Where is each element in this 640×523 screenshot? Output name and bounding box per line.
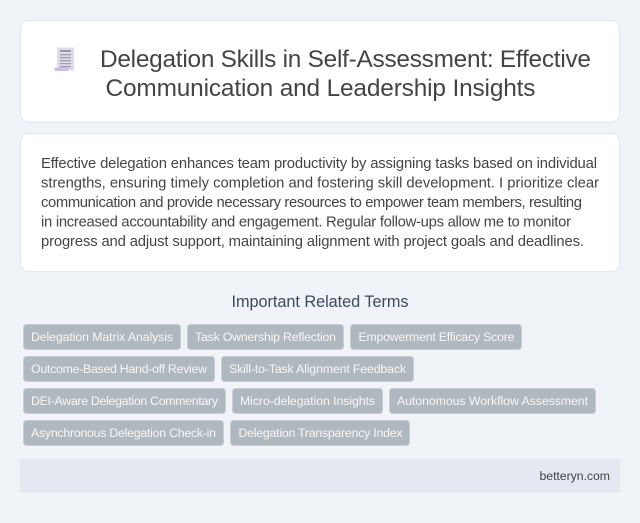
title [100, 46, 591, 102]
tag: empowerment efficacy score [350, 324, 522, 350]
icon: document scroll [54, 48, 74, 71]
description text: communication and provide necessary resources to empower team members, resulting [41, 195, 582, 211]
tag: skill-to-task alignment feedback: Skill-to-Task Alignment Feedback [229, 362, 407, 376]
tag: empowerment efficacy score: Empowerment Efficacy Score [358, 330, 515, 344]
description text: strengths, ensuring timely completion and fostering skill development. I prioritize clear [41, 176, 599, 192]
tag: task ownership reflection [188, 324, 344, 350]
footer bar [20, 459, 620, 492]
panel: title card [20, 20, 620, 122]
tag: autonomous workflow assessment [390, 388, 596, 414]
description text: in increased accountability and engagement. Regular follow-ups allow me to monitor [41, 214, 571, 230]
description text: Effective delegation enhances team productivity by assigning tasks based on individual [41, 156, 597, 172]
tag: autonomous workflow assessment: Autonomous Workflow Assessment [397, 394, 589, 408]
tag: skill-to-task alignment feedback [222, 356, 414, 382]
tag list [24, 324, 596, 446]
tag: asynchronous delegation check-in: Asynchronous Delegation Check-in [31, 426, 216, 440]
tag: outcome-based hand-off review: Outcome-Based Hand-off Review [31, 362, 207, 376]
tag: micro-delegation insights [232, 388, 382, 414]
footer source text: betteryn.com [540, 469, 610, 483]
description text: progress and adjust support, maintaining alignment with project goals and deadlines. [41, 234, 584, 250]
tag: outcome-based hand-off review [24, 356, 214, 382]
tag: asynchronous delegation check-in [24, 420, 224, 446]
title: Communication and Leadership Insights [106, 75, 536, 102]
tag: delegation transparency index: Delegation Transparency Index [238, 426, 403, 440]
tag: delegation matrix analysis: Delegation Matrix Analysis [31, 330, 173, 344]
tag: dei-aware delegation commentary [24, 388, 226, 414]
description text [41, 156, 599, 250]
tag: delegation matrix analysis [24, 324, 180, 350]
heading: important related terms: Important Related Terms [232, 293, 408, 311]
tag: dei-aware delegation commentary: DEI-Aware Delegation Commentary [31, 394, 219, 408]
tag: micro-delegation insights: Micro-delegation Insights [240, 394, 375, 408]
tag: delegation transparency index [230, 420, 410, 446]
title: Delegation Skills in Self-Assessment: Effective [100, 46, 591, 73]
tag: task ownership reflection: Task Ownership Reflection [195, 330, 336, 344]
panel: description card [20, 134, 620, 272]
